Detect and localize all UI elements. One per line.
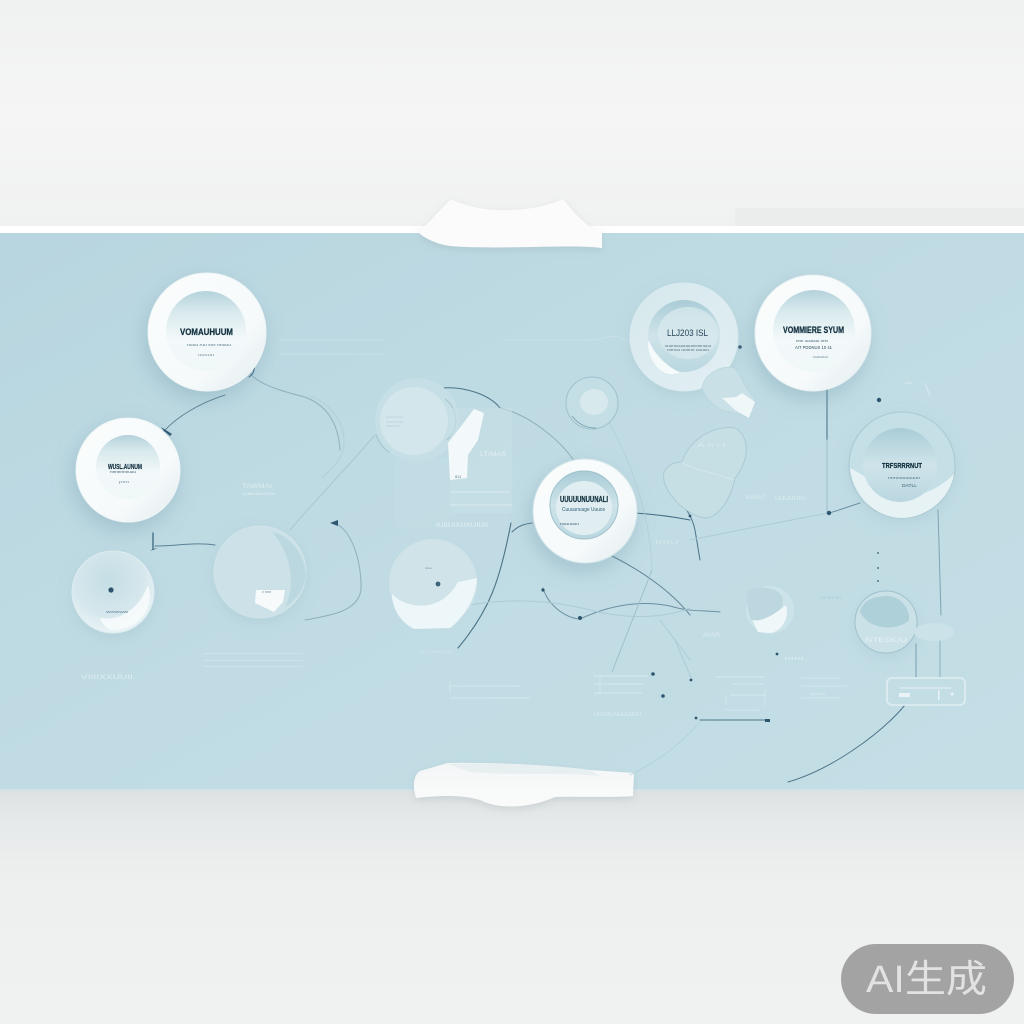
label: center left: uuwuuuvuw [242,491,276,496]
list left [594,675,648,694]
card: translucent center panel: IUIIUIXUXUIUII [436,523,488,529]
ring: left with text: pxn [119,480,129,484]
watermark badge [841,944,1014,1014]
bubble: small top center [566,377,618,429]
caption: nnuu [425,566,432,570]
text cluster: lower center-right: uuuu [810,691,826,696]
list right [801,678,847,698]
bubble: left small [72,551,154,633]
title text: WUSL.AUNUM [108,464,142,471]
text cluster: lower center-right: UUUUU NUUUUUU [594,712,641,718]
ring: top right with text: uuuuuu [813,355,828,359]
caption: NTEDUU [865,637,907,644]
bubble: left large [214,526,306,618]
title text: LLJ203 ISL [667,328,708,338]
list center [715,677,765,710]
title text: VOMMIERE SYUM [783,325,844,335]
text cluster: lower center-right: UUUUUUU [420,649,452,654]
text cluster: lower center-right: IIIIU [655,540,679,546]
background: top band [0,0,1024,227]
background: bottom band [0,790,1024,1024]
ring: top left with text: uuuuu [198,353,214,357]
box: lower right rounded [887,678,965,705]
bubble: lower center [389,539,477,629]
title text: UUUUUNUUNALI [560,495,608,504]
blob: small white crescent [746,586,794,634]
title text: TRFSRRRNUT [882,461,922,470]
ring: top right with text: nnn uuuuuu nnn [796,339,828,343]
blob: droplet center right [664,428,746,518]
shard: white glass under top center ring [702,367,755,418]
title text: VOMAUHUUM [180,327,233,338]
caption: A n i L [697,443,729,449]
ring: top center translucent: nnnuu uunnn uuuuu [667,348,709,352]
shard highlight [722,393,755,418]
ring: top center translucent [630,283,738,391]
dot [108,587,114,593]
card: translucent center panel: 811 [455,474,462,479]
bottom white tab [414,763,634,806]
ring: left with text [76,418,180,522]
ring: top left with text: nuuu ruu xxx nnuuu [187,343,231,347]
ring: top right with text: AIT PDDNUS 10 41 [795,345,832,351]
ring: center with text: Cuuuunuuge Uuuos [562,507,605,513]
background: grey strip top right [735,208,1024,226]
dot [436,582,440,586]
text cluster: lower center-right: nnnnn [821,595,842,600]
ring: center with text: nuuuuuu [560,522,579,526]
ring: far right translucent: DATLL [902,483,917,489]
smudge beside small ring [914,623,954,641]
ring: far right translucent [849,412,955,518]
text cluster: lower center-right: IIIIII [784,656,804,661]
text cluster: lower center-right [420,383,930,718]
ring: far right translucent: nnnnnuuuuun [888,476,920,480]
ring: top right with text [755,275,871,391]
ring: center with text [533,459,637,563]
ring: small lower right [855,591,917,653]
label: center left: TAWMAI [242,484,272,490]
text cluster: lower center-right: KANUT [746,495,766,501]
bubble: upper center [375,378,459,462]
panel: main blue board [0,226,1024,791]
top white tab [418,199,602,248]
watermark text: AI生成 [866,959,987,1001]
text cluster: lower center-right: UUUUUIU [775,496,805,502]
ring: left with text: nnnnnnnuuu [110,470,136,474]
label: center left [242,484,276,496]
connector lines [153,336,941,782]
label: LTIMAS [480,451,507,458]
caption [386,417,403,426]
caption: v nnd [262,590,271,594]
connector end dots [150,345,881,722]
card: left bottom text: VIIIIXXUUII [81,674,133,681]
ring: top left with text [148,273,266,391]
small labels: AYAR [703,632,720,639]
caption: wwwww [106,610,129,614]
card: translucent center panel [395,408,512,529]
ring: top center translucent: uuunnuuuuuunnnnnuuu [665,344,711,348]
